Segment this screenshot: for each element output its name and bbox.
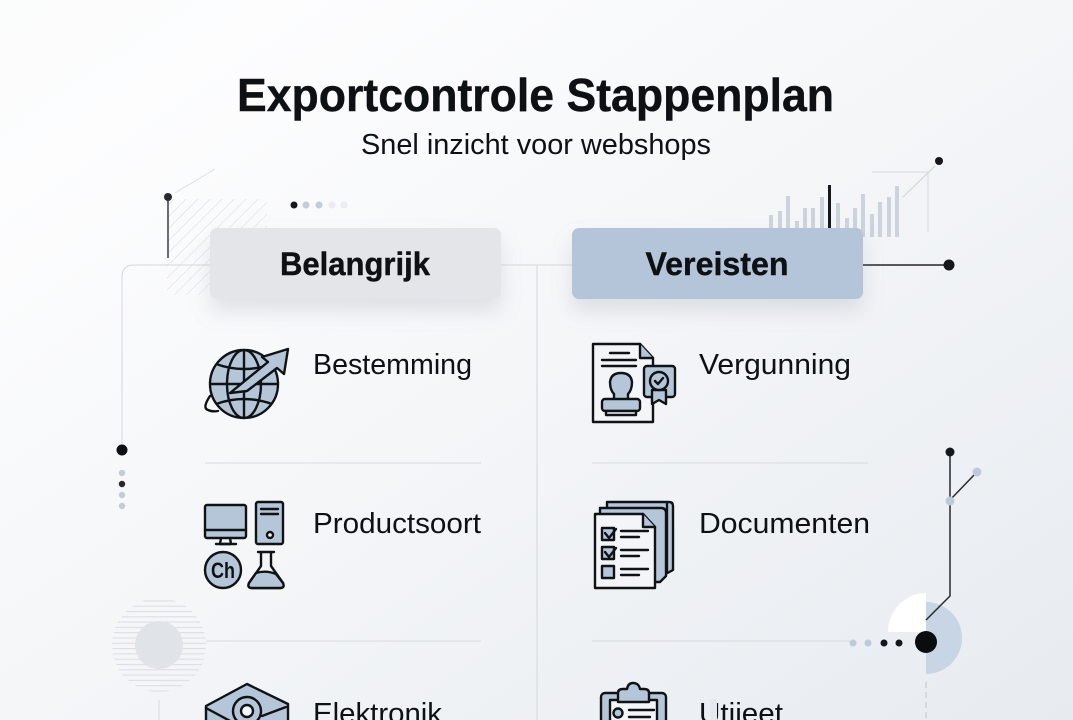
icon: computer, tower, chemical, flask <box>205 502 284 588</box>
decoration: striped circle <box>110 598 208 720</box>
icon: clipboard <box>601 683 666 720</box>
decoration: left node and dots <box>116 444 128 509</box>
panel: column header Belangrijk: Belangrijk <box>280 246 430 282</box>
icon: licence document with stamp <box>593 344 675 422</box>
title: Exportcontrole Stappenplan <box>237 69 834 121</box>
icon: computer, tower, chemical, flask: Ch <box>211 558 235 583</box>
decoration: bar chart <box>769 185 899 237</box>
label: Vergunning: Vergunning <box>699 349 851 381</box>
icon: globe with arrow <box>205 349 288 418</box>
row dividers <box>205 463 868 641</box>
subtitle: Snel inzicht voor webshops <box>361 129 711 161</box>
panel: column header Vereisten <box>572 228 863 299</box>
decoration: top-left hatch and pin <box>164 169 267 295</box>
panel: column header Vereisten: Vereisten <box>646 246 788 282</box>
decoration: right connector <box>862 260 954 270</box>
icon: stacked checklist documents <box>595 502 673 588</box>
label: Productsoort: Productsoort <box>313 508 481 540</box>
decoration: dot row <box>290 202 348 208</box>
decoration: connector lines <box>122 265 572 720</box>
label: Bestemming: Bestemming <box>313 349 472 381</box>
decoration: right network with quarter circles <box>850 448 982 720</box>
panel: column header Belangrijk <box>210 228 501 299</box>
icon: envelope with at sign <box>206 684 288 720</box>
decoration: top-right lines and node <box>872 157 943 232</box>
label: Documenten: Documenten <box>699 508 870 540</box>
